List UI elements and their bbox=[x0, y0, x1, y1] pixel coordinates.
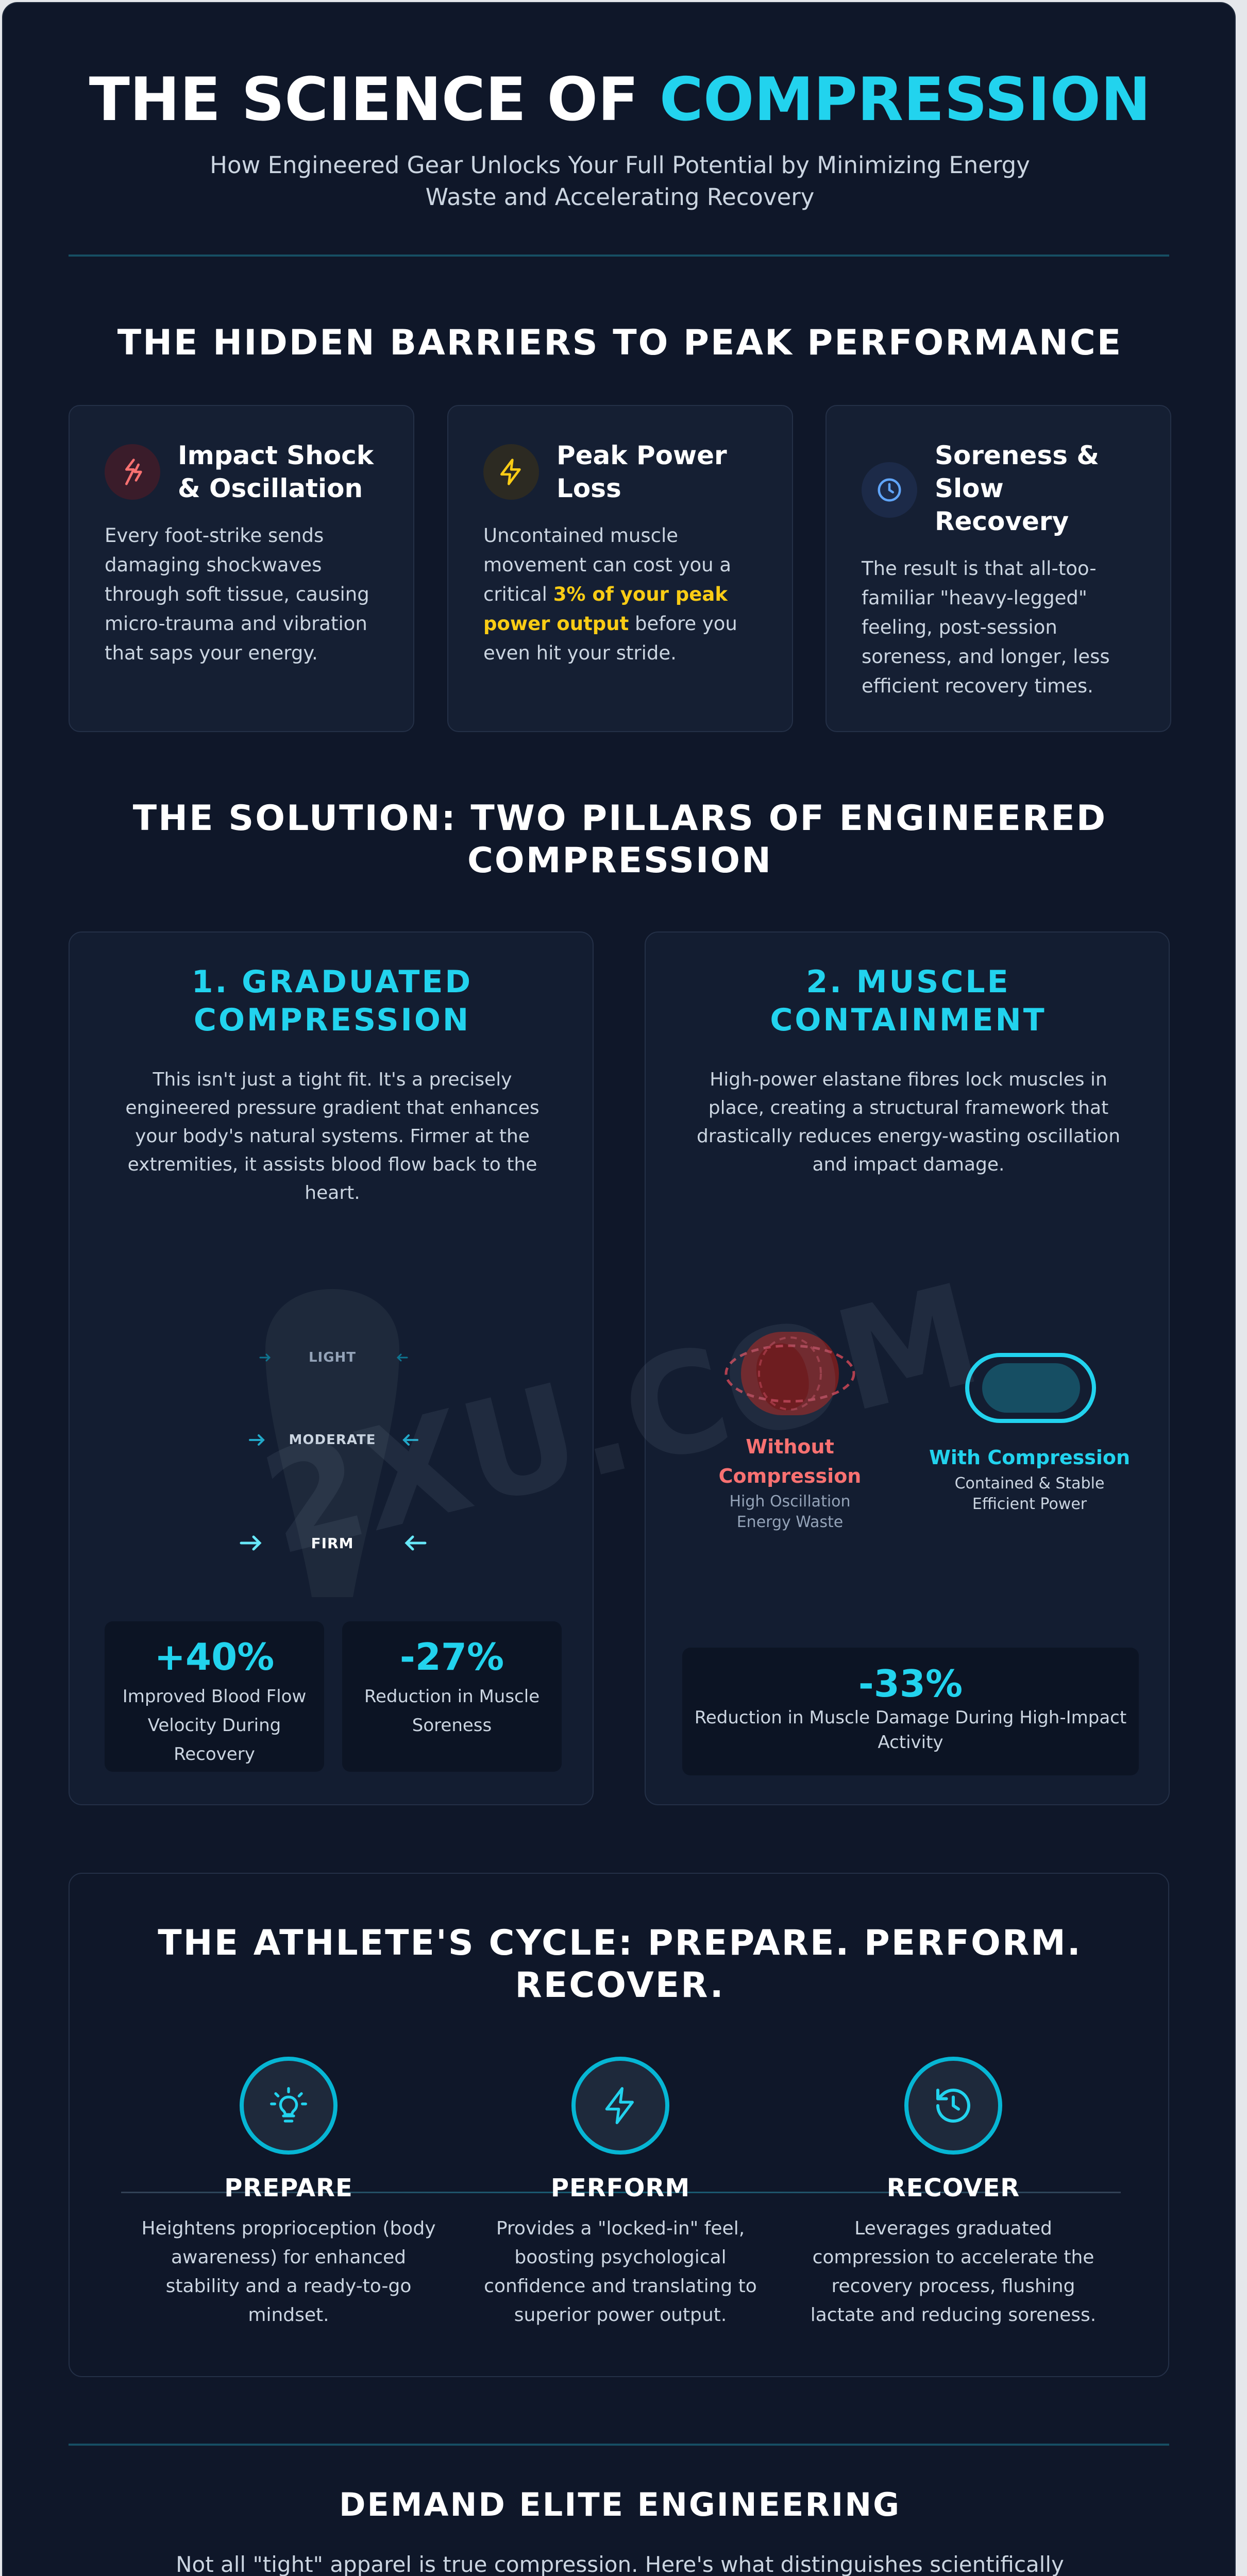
card title: Recovery bbox=[935, 506, 1069, 536]
cycle heading bbox=[158, 1923, 1082, 2006]
pillar heading: COMPRESSION bbox=[194, 1002, 470, 1038]
diagram: without compression: Energy Waste bbox=[737, 1513, 843, 1531]
stat: -33%: Activity bbox=[878, 1732, 943, 1753]
subtitle: Waste and Accelerating Recovery bbox=[426, 183, 814, 211]
title: THE SCIENCE OF COMPRESSION bbox=[89, 65, 1151, 134]
stat: -33%: Reduction in Muscle Damage During High-Impact bbox=[695, 1707, 1126, 1728]
card title bbox=[178, 440, 374, 503]
subtitle bbox=[210, 151, 1030, 211]
card title: Loss bbox=[557, 473, 621, 503]
stat: -27% bbox=[342, 1621, 562, 1772]
pillar body: engineered pressure gradient that enhances bbox=[125, 1097, 540, 1118]
panel: muscle containment bbox=[645, 931, 1170, 1805]
heading: demand elite engineering: DEMAND ELITE ENGINEERING bbox=[339, 2486, 901, 2523]
watermark: 2XU.COM bbox=[248, 1253, 995, 1586]
step: prepare: PREPARE bbox=[224, 2174, 353, 2202]
stat: +40% bbox=[105, 1621, 324, 1772]
stat: -33%: -33% bbox=[858, 1662, 963, 1705]
diagram: with compression: Contained & Stable bbox=[955, 1475, 1104, 1493]
stat: -33% bbox=[682, 1648, 1139, 1775]
step: recover: compression to accelerate the bbox=[813, 2247, 1094, 2268]
panel: impact shock bbox=[69, 405, 414, 732]
pillar body: and impact damage. bbox=[812, 1154, 1005, 1175]
stat: -27%: -27% bbox=[400, 1635, 504, 1679]
pillar body: place, creating a structural framework that bbox=[709, 1097, 1108, 1118]
pillar body: extremities, it assists blood flow back to the bbox=[128, 1154, 537, 1175]
panel: graduated compression bbox=[69, 931, 594, 1805]
pillar body bbox=[125, 1069, 540, 1204]
card body: Uncontained muscle movement can cost you a critical 3% of your peak power output before you even hit your stride. bbox=[483, 524, 737, 664]
label without: Compression bbox=[719, 1465, 861, 1487]
step: perform bbox=[484, 2057, 757, 2326]
step: perform: PERFORM bbox=[551, 2174, 690, 2202]
panel: peak power loss bbox=[447, 405, 793, 732]
card body: The result is that all-too-familiar "heavy-legged" feeling, post-session soreness, and longer, less efficient recovery times. bbox=[862, 557, 1110, 697]
card body: Every foot-strike sends damaging shockwaves through soft tissue, causing micro-trauma and vibration that saps your energy. bbox=[105, 524, 369, 664]
label light: LIGHT bbox=[309, 1350, 356, 1365]
card title: & Oscillation bbox=[178, 473, 363, 503]
pillar body: This isn't just a tight fit. It's a precisely bbox=[153, 1069, 512, 1090]
step: recover: RECOVER bbox=[887, 2174, 1020, 2202]
panel: soreness bbox=[825, 405, 1171, 732]
diagram: with compression bbox=[929, 1353, 1130, 1513]
icon: clock bbox=[862, 462, 917, 518]
pillar heading bbox=[192, 964, 473, 1038]
heading: solution bbox=[133, 798, 1107, 881]
pillar heading bbox=[770, 964, 1047, 1038]
card title bbox=[557, 440, 727, 503]
heading: hidden barriers: THE HIDDEN BARRIERS TO PEAK PERFORMANCE bbox=[117, 323, 1122, 363]
step: recover: recovery process, flushing bbox=[832, 2276, 1075, 2297]
card title: Slow bbox=[935, 473, 1004, 503]
card title: Impact Shock bbox=[178, 440, 374, 470]
step: recover: Leverages graduated bbox=[854, 2218, 1052, 2239]
icon: bolt bbox=[483, 444, 539, 500]
step: recover: lactate and reducing soreness. bbox=[811, 2304, 1096, 2326]
panel: athlete's cycle bbox=[69, 1873, 1169, 2377]
pillar body: drastically reduces energy-wasting oscillation bbox=[697, 1126, 1120, 1147]
diagram: leg pressure gradient bbox=[240, 1289, 427, 1597]
stat: +40%: +40% bbox=[155, 1635, 274, 1679]
cycle heading: RECOVER. bbox=[515, 1965, 725, 2006]
pillar heading: 2. MUSCLE bbox=[806, 964, 1010, 1000]
heading: solution: THE SOLUTION: TWO PILLARS OF ENGINEERED bbox=[133, 798, 1107, 839]
pillar body: your body's natural systems. Firmer at the bbox=[135, 1126, 530, 1147]
heading: solution: COMPRESSION bbox=[467, 840, 772, 881]
diagram: without compression: High Oscillation bbox=[729, 1493, 851, 1511]
step: perform: Provides a "locked-in" feel, boosting psychological confidence and translating to superior power output. bbox=[484, 2218, 757, 2326]
pillar heading: CONTAINMENT bbox=[770, 1002, 1047, 1038]
label firm: FIRM bbox=[311, 1535, 353, 1552]
icon: zigzag bbox=[105, 444, 160, 500]
pillar heading: 1. GRADUATED bbox=[192, 964, 473, 1000]
card title: Peak Power bbox=[557, 440, 727, 470]
pillar body: heart. bbox=[305, 1182, 360, 1204]
pillar body: High-power elastane fibres lock muscles in bbox=[710, 1069, 1107, 1090]
card title bbox=[935, 440, 1099, 536]
subtitle: How Engineered Gear Unlocks Your Full Potential by Minimizing Energy bbox=[210, 151, 1030, 179]
label with: With Compression bbox=[929, 1446, 1130, 1469]
step: prepare: Heightens proprioception (body awareness) for enhanced stability and a ready-to-go mindset. bbox=[141, 2218, 436, 2326]
stat: -27%: Reduction in Muscle Soreness bbox=[364, 1686, 540, 1736]
label without bbox=[719, 1435, 861, 1487]
label moderate: MODERATE bbox=[289, 1432, 376, 1448]
label without: Without bbox=[746, 1435, 834, 1458]
card title: Soreness & bbox=[935, 440, 1099, 470]
stat: +40%: Improved Blood Flow Velocity During Recovery bbox=[123, 1686, 306, 1765]
cycle heading: THE ATHLETE'S CYCLE: PREPARE. PERFORM. bbox=[158, 1923, 1082, 1963]
diagram: without compression bbox=[719, 1332, 861, 1531]
diagram: with compression: Efficient Power bbox=[972, 1495, 1087, 1513]
step: prepare bbox=[141, 2057, 436, 2326]
step: recover bbox=[811, 2057, 1096, 2326]
pillar body bbox=[697, 1069, 1120, 1175]
